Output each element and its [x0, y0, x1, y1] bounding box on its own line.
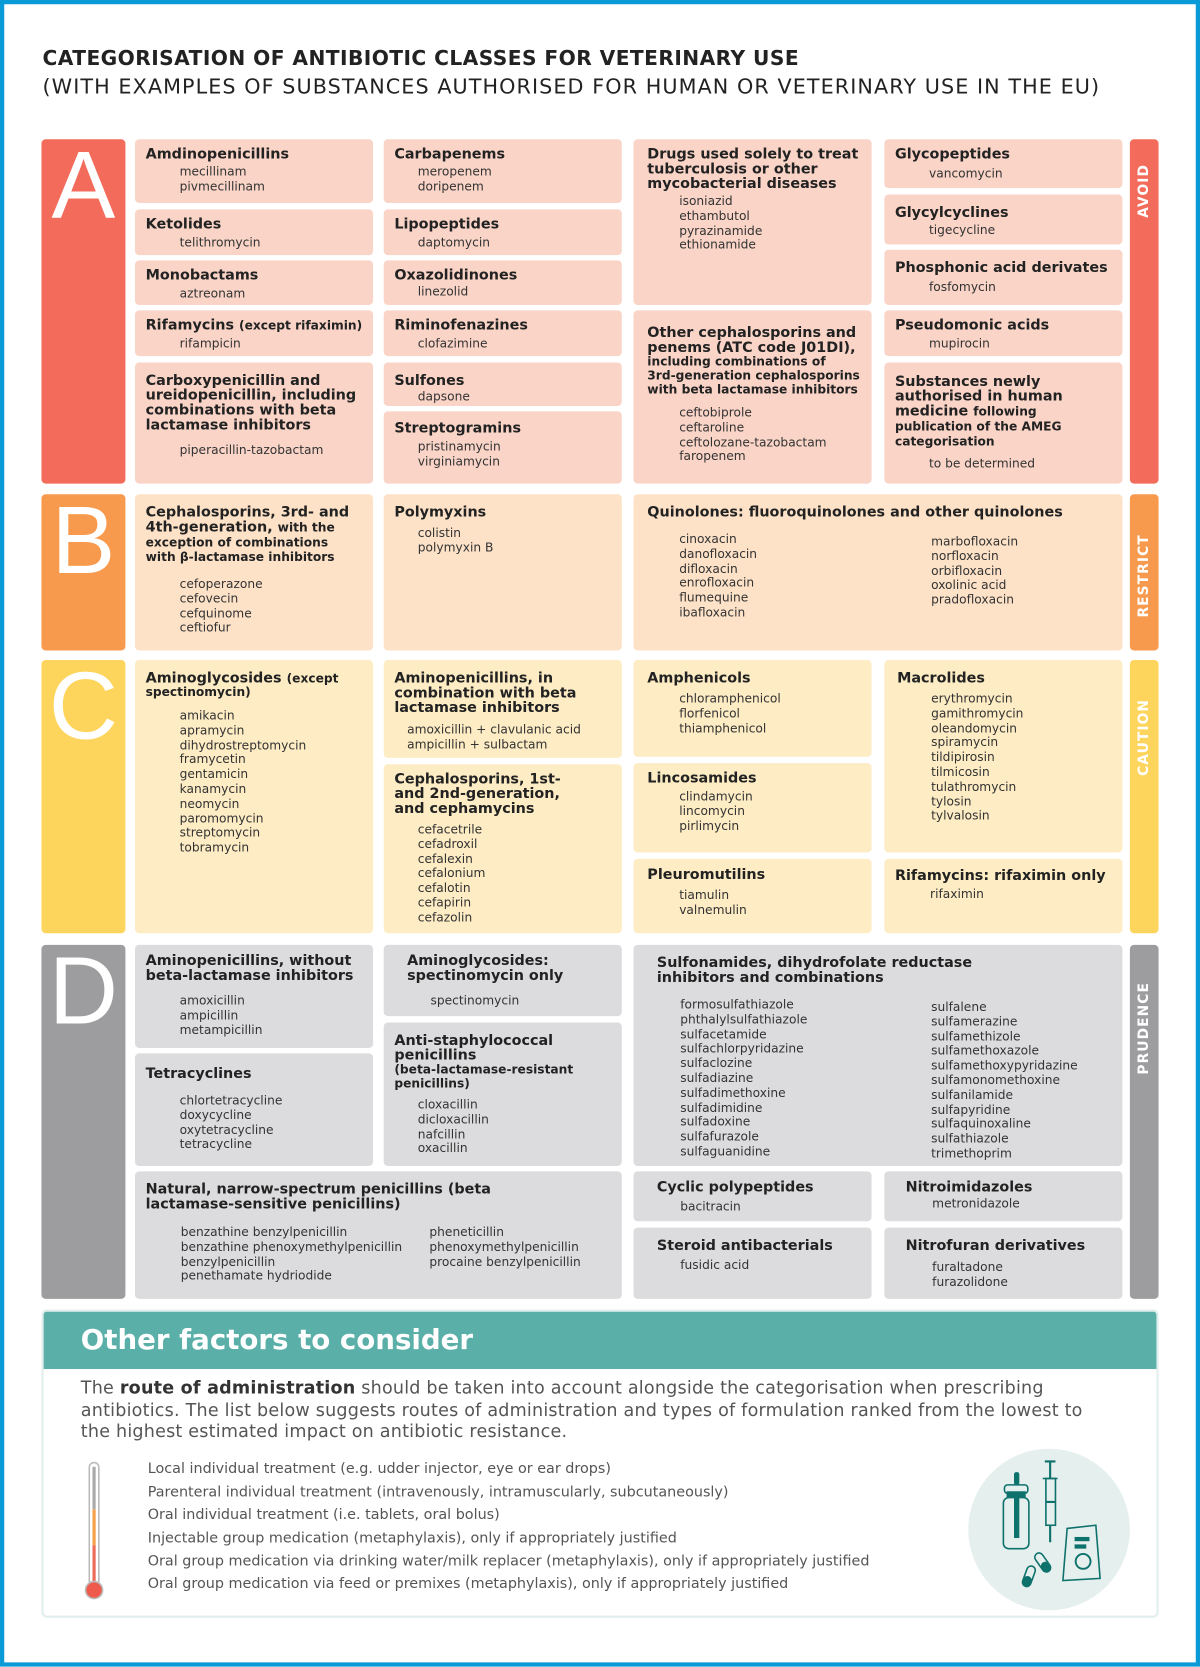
panel: aminopenicillins with inhibitors: combination with beta [394, 685, 576, 702]
panel: cephalosporins 3rd/4th: 4th-generation, with the [146, 519, 335, 536]
panel: other cephalosporins: ceftaroline [679, 420, 744, 435]
panel: macrolides: gamithromycin [931, 706, 1023, 720]
route list: Local individual treatment (e.g. udder injector, eye or ear drops) [148, 1460, 611, 1477]
title [43, 47, 1100, 99]
panel: aminopenicillins without inhibitors: ampicillin [180, 1007, 238, 1022]
panel: anti-staphylococcal penicillins: Anti-staphylococcal [394, 1032, 553, 1049]
panel: newly authorised: Substances newly [895, 373, 1040, 390]
panel: macrolides: oleandomycin [931, 720, 1017, 735]
panel: cephalosporins 1st/2nd: cefalexin [418, 851, 473, 866]
panel: nitroimidazoles: Nitroimidazoles [906, 1179, 1032, 1196]
panel: aminoglycosides: spectinomycin) [146, 685, 251, 699]
panel: glycylcyclines: tigecycline [929, 222, 995, 237]
panel: phosphonic acid [884, 250, 1122, 305]
panel: sulfonamides: phthalylsulfathiazole [680, 1012, 807, 1027]
panel: quinolones: cinoxacin [679, 531, 737, 546]
panel: streptogramins: Streptogramins [394, 420, 521, 437]
panel: aminoglycosides: paromomycin [180, 811, 264, 825]
panel: cephalosporins 3rd/4th [135, 494, 373, 650]
panel: sulfonamides: sulfamethoxypyridazine [931, 1058, 1078, 1073]
panel: cephalosporins 1st/2nd: and cephamycins [394, 800, 534, 817]
panel: cephalosporins 1st/2nd: cefalonium [418, 866, 485, 880]
panel: aminoglycosides [135, 660, 373, 933]
side label: prudence: PRUDENCE [1136, 982, 1152, 1075]
panel: carboxypenicillin: lactamase inhibitors [146, 417, 311, 434]
panel: glycopeptides: vancomycin [929, 166, 1003, 181]
panel: cephalosporins 1st/2nd: cefalotin [418, 880, 471, 895]
panel: aminoglycosides: tobramycin [180, 840, 249, 855]
panel: pleuromutilins [633, 859, 872, 933]
panel: tetracyclines: tetracycline [180, 1137, 252, 1152]
panel: quinolones: difloxacin [679, 561, 738, 576]
panel: newly authorised: authorised in human [895, 388, 1063, 405]
panel: rifamycins: Rifamycins (except rifaximin) [146, 317, 362, 334]
panel: aminopenicillins with inhibitors [384, 660, 622, 758]
panel: cephalosporins 1st/2nd: and 2nd-generation, [394, 785, 560, 802]
panel: cephalosporins 3rd/4th: cefquinome [180, 605, 252, 620]
panel: lipopeptides: daptomycin [418, 235, 490, 250]
panel: carbapenems: doripenem [418, 178, 484, 193]
panel: tuberculosis drugs: mycobacterial diseases [647, 175, 837, 192]
panel: carboxypenicillin [135, 362, 373, 484]
panel: sulfonamides: sulfadimethoxine [680, 1085, 786, 1100]
panel: newly authorised: categorisation [895, 434, 995, 449]
panel: carboxypenicillin: piperacillin-tazobactam [180, 442, 323, 457]
panel: lipopeptides: Lipopeptides [394, 216, 499, 233]
panel: amdinopenicillins: mecillinam [180, 164, 247, 179]
panel: cephalosporins 3rd/4th: cefovecin [180, 591, 238, 606]
panel: sulfonamides: sulfamonomethoxine [931, 1072, 1060, 1087]
panel: sulfonamides: inhibitors and combinations [657, 969, 884, 986]
panel: ketolides [135, 209, 373, 255]
panel: phosphonic acid: Phosphonic acid derivates [895, 259, 1108, 276]
panel: amphenicols [633, 660, 872, 757]
panel: other cephalosporins: 3rd-generation cephalosporins [647, 368, 860, 383]
panel: natural penicillins: penethamate hydriodide [181, 1268, 332, 1283]
panel: rifamycins [135, 310, 373, 356]
heading: other factors: Other factors to consider [81, 1324, 473, 1356]
panel: other factors [41, 1309, 1159, 1618]
side label: restrict: RESTRICT [1136, 534, 1152, 618]
panel: cephalosporins 3rd/4th: exception of combinations [146, 535, 328, 550]
panel: ketolides: Ketolides [146, 216, 221, 233]
panel: anti-staphylococcal penicillins: dicloxacillin [418, 1112, 489, 1126]
panel: carbapenems [384, 139, 622, 203]
panel: sulfonamides: sulfamerazine [931, 1014, 1017, 1029]
panel: natural penicillins: phenoxymethylpenicillin [429, 1239, 579, 1254]
panel: sulfonamides: sulfadiazine [680, 1070, 753, 1085]
panel: tuberculosis drugs: ethambutol [679, 208, 750, 223]
panel: aminopenicillins without inhibitors [135, 945, 373, 1048]
category B bar: B [52, 488, 115, 594]
panel: tuberculosis drugs [633, 139, 872, 305]
panel: steroid antibacterials: Steroid antibacterials [657, 1237, 833, 1254]
panel: sulfonamides: sulfapyridine [931, 1102, 1010, 1117]
panel: monobactams [135, 260, 373, 305]
panel: sulfonamides: sulfamethizole [931, 1028, 1021, 1043]
intro text: The route of administration should be taken into account alongside the categorisation when prescribing antibiotics. The list below suggests routes of administration and types of formulation ranked from the lowest to the highest estimated impact on antibiotic resistance. [81, 1378, 1083, 1441]
panel: polymyxins: polymyxin B [418, 540, 493, 555]
panel: other cephalosporins [633, 310, 872, 484]
panel: amdinopenicillins [135, 139, 373, 203]
route list: Injectable group medication (metaphylaxis), only if appropriately justified [148, 1530, 677, 1547]
panel: macrolides: tilmicosin [931, 764, 990, 779]
panel: other cephalosporins: Other cephalosporins and [647, 324, 856, 341]
panel: aminoglycosides: amikacin [180, 708, 235, 723]
panel: sulfones: Sulfones [394, 372, 464, 389]
panel: rifaximin: Rifamycins: rifaximin only [895, 867, 1106, 884]
panel: sulfonamides: Sulfonamides, dihydrofolate reductase [657, 954, 972, 971]
panel: other cephalosporins: faropenem [679, 449, 746, 464]
panel: amphenicols: chloramphenicol [679, 691, 781, 706]
panel: riminofenazines: Riminofenazines [394, 317, 528, 334]
panel: tetracyclines: chlortetracycline [180, 1093, 282, 1108]
panel: sulfones: dapsone [418, 389, 470, 404]
panel: quinolones [633, 494, 1122, 650]
panel: streptogramins: virginiamycin [418, 454, 500, 469]
panel: quinolones: ibafloxacin [679, 605, 745, 620]
panel: cephalosporins 3rd/4th: Cephalosporins, 3rd- and [146, 504, 349, 521]
panel: tuberculosis drugs: pyrazinamide [679, 223, 762, 238]
panel: aminopenicillins without inhibitors: amoxicillin [180, 993, 245, 1008]
panel: oxazolidinones [384, 260, 622, 305]
panel: anti-staphylococcal penicillins: cloxacillin [418, 1097, 478, 1112]
panel: other cephalosporins: ceftolozane-tazobactam [679, 434, 827, 449]
panel: aminoglycosides: Aminoglycosides (except [146, 670, 338, 687]
panel: newly authorised: publication of the AMEG [895, 419, 1062, 434]
panel: cephalosporins 3rd/4th: with β-lactamase inhibitors [146, 550, 335, 564]
route list: Parenteral individual treatment (intravenously, intramuscularly, subcutaneously) [148, 1483, 729, 1500]
category D bar [41, 945, 125, 1299]
panel: rifaximin: rifaximin [930, 886, 984, 901]
panel: pleuromutilins: valnemulin [679, 902, 747, 917]
panel: riminofenazines [384, 310, 622, 356]
panel: oxazolidinones: linezolid [418, 284, 468, 299]
panel: aminopenicillins without inhibitors: beta-lactamase inhibitors [146, 967, 353, 984]
panel: quinolones: norfloxacin [931, 548, 999, 563]
panel: tuberculosis drugs: isoniazid [679, 193, 733, 208]
panel: natural penicillins [135, 1171, 622, 1299]
title: (WITH EXAMPLES OF SUBSTANCES AUTHORISED FOR HUMAN OR VETERINARY USE IN THE EU) [43, 74, 1100, 99]
panel: tetracyclines [135, 1053, 373, 1166]
panel: lincosamides [633, 763, 872, 852]
panel: other cephalosporins: ceftobiprole [679, 405, 752, 420]
panel: glycopeptides: Glycopeptides [895, 146, 1010, 163]
panel: ketolides: telithromycin [180, 235, 261, 250]
category B bar [41, 494, 125, 650]
panel: anti-staphylococcal penicillins [384, 1023, 622, 1166]
panel: cephalosporins 1st/2nd: cefacetrile [418, 822, 482, 837]
panel: phosphonic acid: fosfomycin [929, 280, 996, 294]
panel: natural penicillins: Natural, narrow-spectrum penicillins (beta [146, 1181, 491, 1198]
panel: aminoglycosides: neomycin [180, 796, 239, 811]
panel: cephalosporins 1st/2nd: cefazolin [418, 910, 472, 924]
panel: anti-staphylococcal penicillins: nafcillin [418, 1126, 465, 1141]
panel: polymyxins: colistin [418, 525, 461, 540]
panel: steroid antibacterials: fusidic acid [680, 1257, 749, 1272]
panel: cephalosporins 1st/2nd [384, 764, 622, 933]
panel: spectinomycin: Aminoglycosides: [407, 952, 549, 969]
panel: aminoglycosides: framycetin [180, 752, 246, 767]
panel: cephalosporins 1st/2nd: Cephalosporins, 1st- [394, 771, 561, 788]
panel: anti-staphylococcal penicillins: (beta-lactamase-resistant [394, 1062, 573, 1077]
route list: Oral group medication via feed or premixes (metaphylaxis), only if appropriately justified [148, 1576, 788, 1593]
panel: sulfonamides: sulfaguanidine [680, 1144, 770, 1159]
panel: carboxypenicillin: ureidopenicillin, including [146, 387, 356, 404]
panel: macrolides: spiramycin [931, 735, 998, 750]
route list: Oral individual treatment (i.e. tablets, oral bolus) [148, 1507, 500, 1524]
panel: pseudomonic acids: mupirocin [929, 336, 990, 351]
panel: natural penicillins: benzathine benzylpenicillin [181, 1224, 347, 1239]
panel: anti-staphylococcal penicillins: penicillins) [394, 1076, 470, 1091]
panel: quinolones: danofloxacin [679, 546, 757, 561]
panel: amdinopenicillins: pivmecillinam [180, 178, 265, 193]
side label: restrict [1130, 494, 1159, 650]
panel: other cephalosporins: including combinations of [647, 354, 826, 369]
panel: tetracyclines: Tetracyclines [146, 1065, 252, 1082]
panel: monobactams: aztreonam [180, 286, 245, 301]
panel: newly authorised: to be determined [929, 456, 1035, 471]
panel: sulfonamides: sulfaclozine [680, 1056, 752, 1071]
panel: aminopenicillins without inhibitors: metampicillin [180, 1022, 262, 1037]
panel: nitrofuran derivatives: Nitrofuran derivatives [906, 1237, 1085, 1254]
panel: nitrofuran derivatives: furaltadone [932, 1260, 1003, 1274]
panel: sulfonamides: sulfachlorpyridazine [680, 1041, 804, 1056]
panel: aminoglycosides: gentamicin [180, 767, 248, 781]
panel: cephalosporins 1st/2nd: cefadroxil [418, 836, 477, 851]
panel: steroid antibacterials [633, 1228, 872, 1299]
panel: tuberculosis drugs: tuberculosis or other [647, 160, 818, 178]
category C bar: C [49, 654, 118, 760]
panel: cyclic polypeptides: Cyclic polypeptides [657, 1179, 814, 1196]
panel: macrolides [884, 660, 1122, 852]
panel: sulfonamides: sulfafurazole [680, 1129, 759, 1144]
panel: pleuromutilins: tiamulin [679, 888, 729, 902]
panel: aminopenicillins without inhibitors: Aminopenicillins, without [146, 952, 351, 969]
panel: macrolides: Macrolides [897, 670, 985, 687]
panel: sulfonamides: formosulfathiazole [680, 997, 794, 1012]
panel: quinolones: pradofloxacin [931, 592, 1014, 607]
panel: polymyxins: Polymyxins [394, 504, 486, 521]
panel: cyclic polypeptides: bacitracin [680, 1199, 741, 1214]
panel: anti-staphylococcal penicillins: penicillins [394, 1047, 476, 1064]
panel: glycopeptides [884, 139, 1122, 188]
panel: pseudomonic acids: Pseudomonic acids [895, 317, 1049, 334]
panel: quinolones: orbifloxacin [931, 563, 1002, 578]
panel: amphenicols: Amphenicols [647, 670, 751, 687]
panel: natural penicillins: lactamase-sensitive penicillins) [146, 1196, 401, 1213]
panel: sulfonamides [633, 945, 1122, 1166]
panel: cephalosporins 3rd/4th: cefoperazone [180, 576, 263, 591]
icon: medication illustration [968, 1448, 1130, 1610]
panel: carboxypenicillin: combinations with beta [146, 402, 336, 419]
panel: cephalosporins 3rd/4th: ceftiofur [180, 620, 231, 635]
panel: quinolones: enrofloxacin [679, 575, 754, 590]
panel: aminopenicillins with inhibitors: ampicillin + sulbactam [407, 736, 547, 751]
panel: aminoglycosides: apramycin [180, 723, 244, 737]
panel: natural penicillins: benzylpenicillin [181, 1254, 275, 1269]
category D bar: D [49, 939, 118, 1045]
panel: aminopenicillins with inhibitors: amoxicillin + clavulanic acid [407, 722, 581, 737]
panel: sulfones [384, 362, 622, 406]
panel: sulfonamides: sulfalene [931, 999, 987, 1014]
panel: aminopenicillins with inhibitors: Aminopenicillins, in [394, 670, 553, 687]
panel: macrolides: tylvalosin [931, 808, 990, 823]
panel: macrolides: erythromycin [931, 691, 1013, 706]
category A bar: A [52, 133, 115, 239]
panel: cephalosporins 1st/2nd: cefapirin [418, 895, 471, 910]
panel: tetracyclines: oxytetracycline [180, 1122, 274, 1137]
panel: lincosamides: Lincosamides [647, 770, 757, 787]
panel: pseudomonic acids [884, 310, 1122, 356]
panel: nitroimidazoles: metronidazole [932, 1196, 1020, 1211]
heading: other factors [44, 1312, 1161, 1369]
panel: aminoglycosides: streptomycin [180, 825, 260, 840]
panel: sulfonamides: sulfamethoxazole [931, 1043, 1039, 1058]
panel: lincosamides: pirlimycin [679, 818, 739, 833]
panel: nitrofuran derivatives: furazolidone [932, 1274, 1008, 1289]
panel: spectinomycin: spectinomycin [430, 993, 519, 1008]
panel: nitrofuran derivatives [884, 1228, 1122, 1299]
panel: newly authorised [884, 362, 1122, 484]
category A bar [41, 139, 125, 484]
side label: caution [1130, 660, 1159, 933]
panel: tuberculosis drugs: ethionamide [679, 237, 756, 252]
panel: quinolones: flumequine [679, 590, 748, 605]
panel: sulfonamides: sulfanilamide [931, 1087, 1013, 1102]
title: CATEGORISATION OF ANTIBIOTIC CLASSES FOR VETERINARY USE [43, 47, 799, 70]
side label: prudence [1130, 945, 1159, 1299]
thermometer icon [84, 1462, 104, 1600]
route list: Oral group medication via drinking water/milk replacer (metaphylaxis), only if appropriately justified [148, 1553, 869, 1570]
side label: caution: CAUTION [1136, 699, 1152, 776]
panel: carboxypenicillin: Carboxypenicillin and [146, 372, 320, 389]
panel: polymyxins [384, 494, 622, 650]
panel: riminofenazines: clofazimine [418, 336, 488, 351]
side label: avoid [1130, 139, 1159, 484]
panel: glycylcyclines: Glycylcyclines [895, 204, 1008, 221]
panel: sulfonamides: sulfaquinoxaline [931, 1116, 1031, 1131]
panel: aminoglycosides: kanamycin [180, 781, 246, 796]
panel: sulfonamides: sulfadoxine [680, 1114, 750, 1129]
panel: other cephalosporins: with beta lactamase inhibitors [647, 382, 858, 396]
panel: sulfonamides: sulfadimidine [680, 1100, 762, 1115]
panel: macrolides: tylosin [931, 794, 972, 808]
panel: lincosamides: lincomycin [679, 803, 745, 818]
panel: monobactams: Monobactams [146, 267, 258, 284]
panel: amphenicols: florfenicol [679, 706, 740, 720]
panel: newly authorised: medicine following [895, 403, 1037, 420]
panel: sulfonamides: sulfacetamide [680, 1026, 767, 1041]
panel: amphenicols: thiamphenicol [679, 720, 766, 735]
panel: natural penicillins: pheneticillin [429, 1224, 504, 1239]
panel: tetracyclines: doxycycline [180, 1107, 252, 1122]
panel: rifaximin [884, 859, 1122, 933]
panel: macrolides: tulathromycin [931, 779, 1016, 794]
panel: sulfonamides: trimethoprim [931, 1146, 1012, 1161]
panel: quinolones: oxolinic acid [931, 578, 1006, 592]
panel: glycylcyclines [884, 195, 1122, 244]
panel: pleuromutilins: Pleuromutilins [647, 866, 765, 883]
panel: nitroimidazoles [884, 1171, 1122, 1221]
panel: oxazolidinones: Oxazolidinones [394, 267, 517, 284]
panel: amdinopenicillins: Amdinopenicillins [146, 146, 289, 163]
panel: streptogramins: pristinamycin [418, 439, 501, 454]
panel: spectinomycin: spectinomycin only [407, 967, 563, 984]
side label: avoid: AVOID [1136, 164, 1152, 218]
panel: rifamycins: rifampicin [180, 336, 241, 351]
panel: tuberculosis drugs: Drugs used solely to treat [647, 146, 858, 163]
panel: lincosamides: clindamycin [679, 789, 753, 804]
panel: sulfonamides: sulfathiazole [931, 1131, 1009, 1146]
panel: spectinomycin [384, 945, 622, 1016]
panel: quinolones: marbofloxacin [931, 534, 1018, 548]
panel: quinolones: Quinolones: fluoroquinolones and other quinolones [647, 504, 1063, 521]
route list [148, 1460, 869, 1593]
panel: other cephalosporins: penems (ATC code J01DI), [647, 339, 856, 356]
panel: natural penicillins: procaine benzylpenicillin [429, 1254, 581, 1269]
panel: anti-staphylococcal penicillins: oxacillin [418, 1141, 468, 1156]
category C bar [41, 660, 125, 933]
panel: lipopeptides [384, 209, 622, 255]
panel: natural penicillins: benzathine phenoxymethylpenicillin [181, 1239, 402, 1254]
panel: macrolides: tildipirosin [931, 750, 995, 764]
panel: aminoglycosides: dihydrostreptomycin [180, 737, 306, 752]
panel: streptogramins [384, 411, 622, 484]
panel: cyclic polypeptides [633, 1171, 872, 1221]
panel: carbapenems: meropenem [418, 164, 492, 179]
panel: aminopenicillins with inhibitors: lactamase inhibitors [394, 699, 560, 716]
panel: carbapenems: Carbapenems [394, 146, 505, 163]
